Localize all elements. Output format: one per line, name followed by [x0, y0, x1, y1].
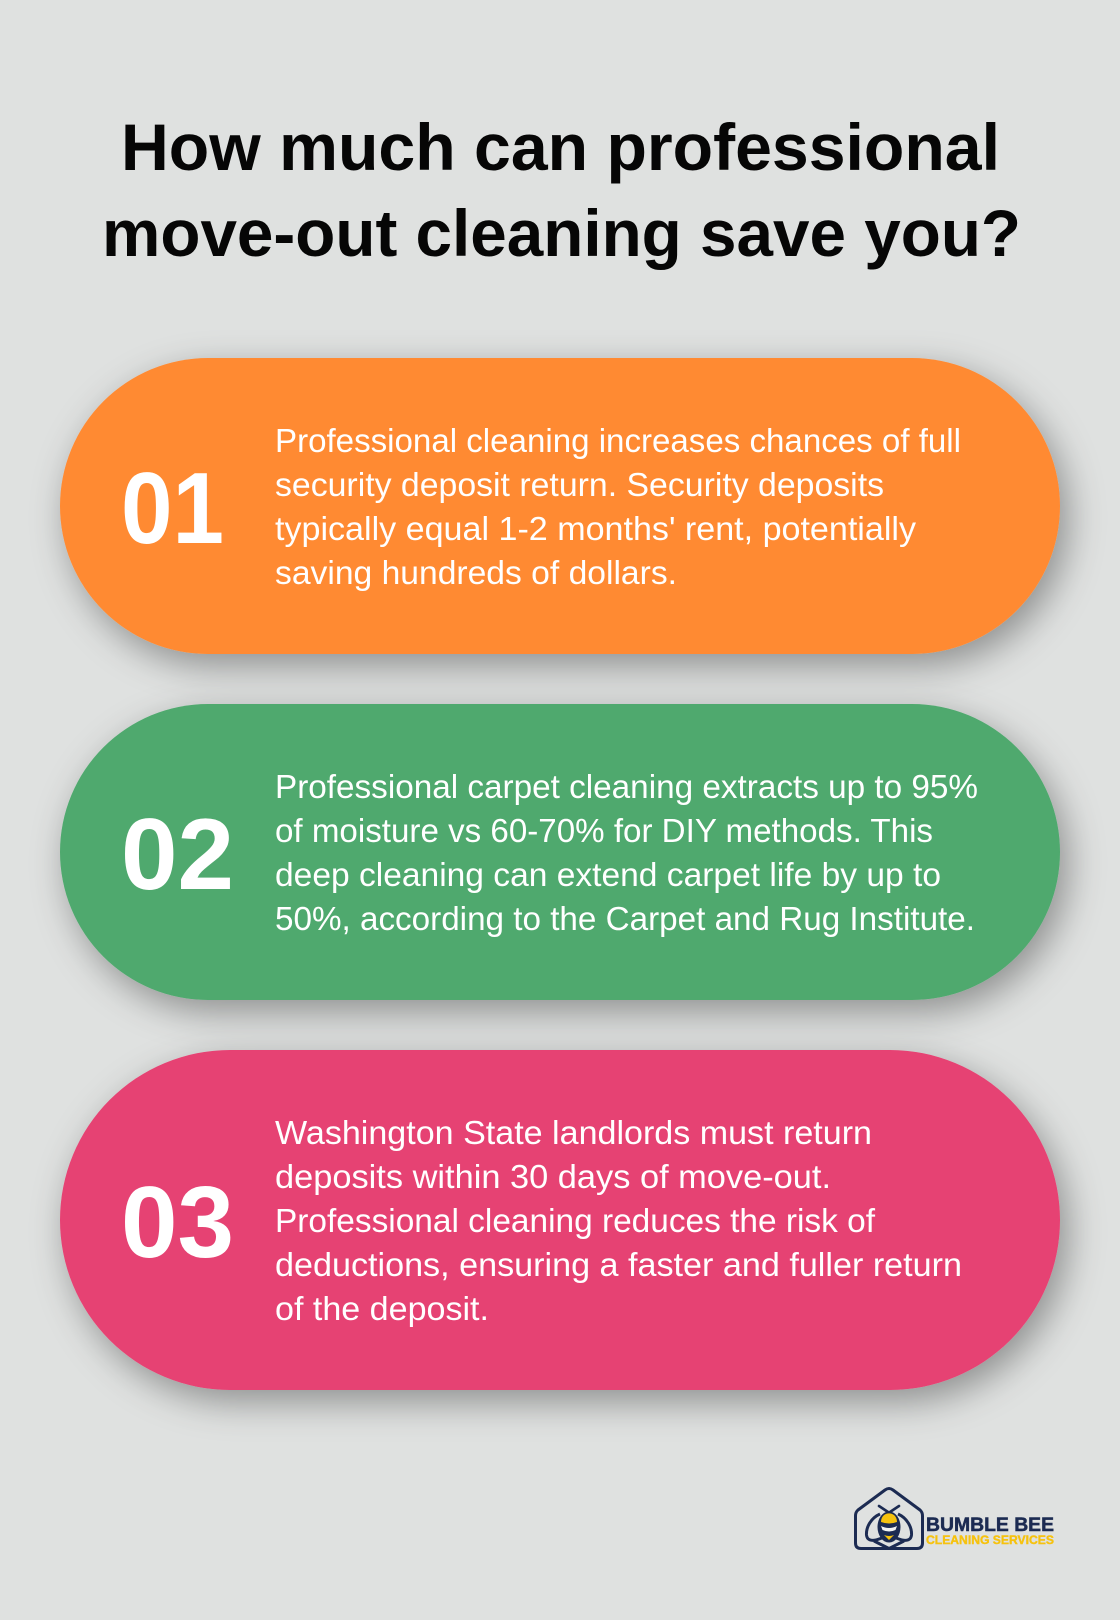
orange pill	[60, 358, 1060, 654]
title	[102, 110, 1021, 270]
text block 02: of moisture vs 60-70% for DIY methods. This	[275, 813, 933, 850]
green pill	[60, 704, 1060, 1000]
text block 01	[275, 423, 961, 592]
logo wordmark: BUMBLE BEE	[926, 1514, 1054, 1536]
text block 02: 50%, according to the Carpet and Rug Institute.	[275, 901, 975, 938]
number 02: 02	[121, 799, 234, 911]
pink pill	[60, 1050, 1060, 1390]
text block 01: security deposit return. Security deposits	[275, 467, 884, 504]
text block 02: deep cleaning can extend carpet life by up to	[275, 857, 941, 894]
text block 01: typically equal 1-2 months' rent, potentially	[275, 511, 916, 548]
panel: step 01	[60, 358, 1060, 654]
text block 03: of the deposit.	[275, 1291, 489, 1328]
logo tagline: CLEANING SERVICES	[926, 1533, 1054, 1547]
text block 01: saving hundreds of dollars.	[275, 555, 677, 592]
text block 02	[275, 769, 978, 938]
title: How much can professional	[121, 110, 1000, 184]
icon: house with bee	[856, 1488, 922, 1548]
logo: Bumble Bee Cleaning Services	[856, 1488, 1054, 1548]
text block 03: Professional cleaning reduces the risk of	[275, 1203, 876, 1240]
text block 03	[275, 1115, 962, 1328]
panel: step 02	[60, 704, 1060, 1000]
text block 02: Professional carpet cleaning extracts up to 95%	[275, 769, 978, 806]
text block 03: Washington State landlords must return	[275, 1115, 872, 1152]
panel: step 03	[60, 1050, 1060, 1390]
text block 01: Professional cleaning increases chances of full	[275, 423, 961, 460]
title: move-out cleaning save you?	[102, 196, 1021, 270]
text block 03: deductions, ensuring a faster and fuller return	[275, 1247, 962, 1284]
number 03: 03	[121, 1167, 234, 1279]
number 01: 01	[121, 453, 224, 565]
text block 03: deposits within 30 days of move-out.	[275, 1159, 831, 1196]
